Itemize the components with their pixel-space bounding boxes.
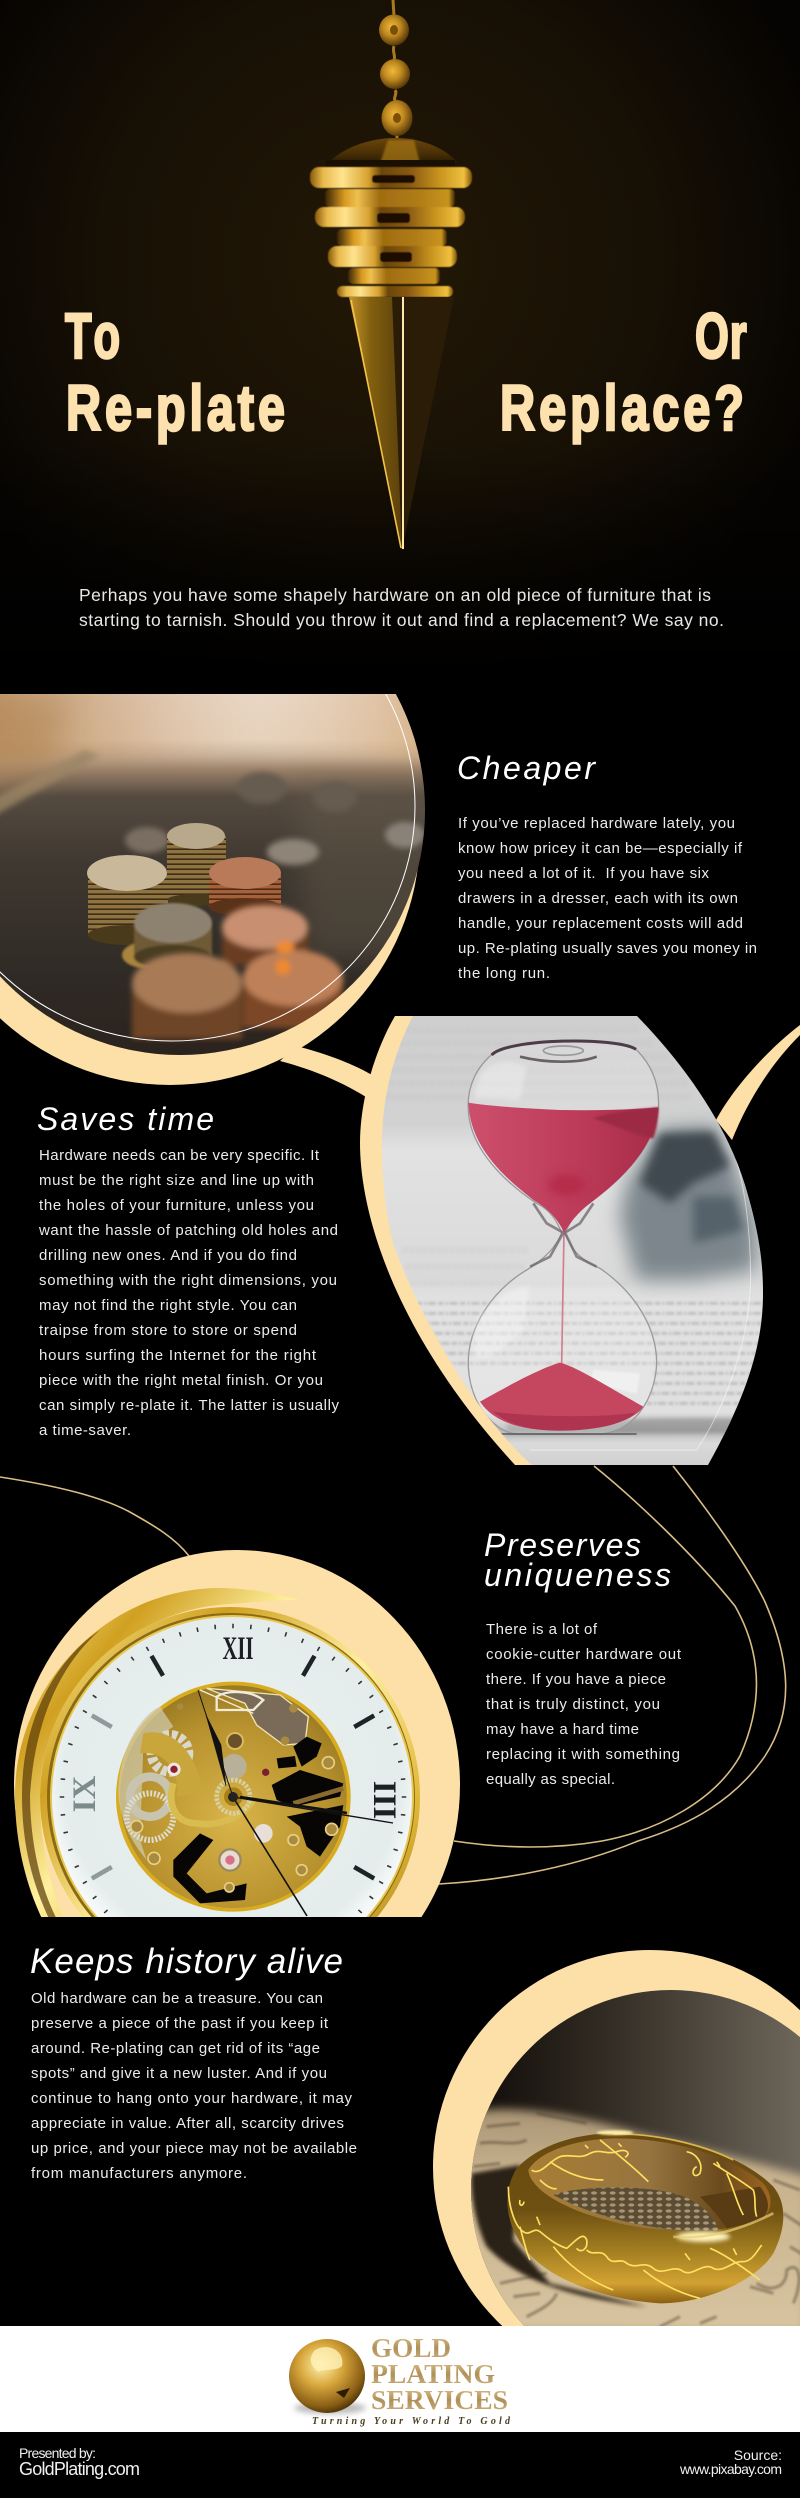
- title: To Re-plate: [65, 300, 285, 445]
- logo wordmark: GOLD: [371, 2333, 451, 2363]
- footer: [0, 2432, 800, 2498]
- text: saves time body: piece with the right metal finish. Or you: [39, 1372, 323, 1389]
- text: preserves body: [486, 1621, 682, 1788]
- icon: gold pendulum: [310, 0, 472, 550]
- shadow: [471, 2165, 647, 2307]
- text: cheaper body: If you’ve replaced hardware lately, you: [458, 815, 735, 832]
- newspaper lines: [417, 1303, 763, 1403]
- text: saves time body: can simply re-plate it. The latter is usually: [39, 1397, 340, 1414]
- presented by: Presented by:: [19, 2445, 96, 2461]
- panel: keeps history alive: [31, 1948, 800, 2326]
- text: keeps history body: [31, 1990, 357, 2182]
- ring: [507, 2130, 783, 2303]
- title: Or Replace?: Replace?: [500, 374, 744, 445]
- heading: Cheaper: Cheaper: [457, 750, 596, 786]
- photo: hourglass: [370, 1016, 770, 1466]
- intro text: [79, 585, 724, 630]
- text: saves time body: [38, 1147, 340, 1439]
- logo band: [0, 2326, 800, 2432]
- text: cheaper body: know how pricey it can be—especially if: [458, 840, 743, 857]
- text: preserves body: may have a hard time: [486, 1721, 639, 1738]
- title: To Re-plate: Re-plate: [66, 374, 285, 445]
- logo wordmark: Turning Your World To Gold: [312, 2416, 511, 2427]
- heading: Preserves uniqueness: [484, 1527, 671, 1593]
- heading: Saves time: Saves time: [37, 1101, 214, 1137]
- text: saves time body: Hardware needs can be very specific. It: [39, 1147, 320, 1164]
- text: cheaper body: up. Re-plating usually saves you money in: [458, 940, 757, 957]
- text: cheaper body: handle, your replacement costs will add: [458, 915, 743, 932]
- text: preserves body: replacing it with something: [486, 1746, 680, 1763]
- ring inscription: [508, 2140, 762, 2298]
- source: Source:: [734, 2447, 782, 2463]
- text: keeps history body: up price, and your piece may not be available: [31, 2140, 357, 2157]
- text: cheaper body: you need a lot of it. If you have six: [458, 865, 710, 882]
- text: saves time body: something with the right dimensions, you: [39, 1272, 337, 1289]
- text: keeps history body: preserve a piece of the past if you keep it: [31, 2015, 329, 2032]
- text: saves time body: a time-saver.: [39, 1422, 131, 1439]
- numerals: [67, 1631, 402, 1819]
- text: keeps history body: appreciate in value. After all, scarcity drives: [31, 2115, 344, 2132]
- text: saves time body: the holes of your furniture, unless you: [39, 1197, 314, 1214]
- text: keeps history body: Old hardware can be a treasure. You can: [31, 1990, 323, 2007]
- text: preserves body: cookie-cutter hardware out: [486, 1646, 682, 1663]
- skeleton movement: [116, 1682, 351, 1912]
- cream arcs beside hourglass: [360, 1016, 800, 1465]
- watch hands: [198, 1690, 393, 1916]
- text: saves time body: hours surfing the Internet for the right: [39, 1347, 317, 1364]
- numerals: IX: [67, 1776, 103, 1812]
- text: keeps history body: from manufacturers anymore.: [31, 2165, 247, 2182]
- hour marks: [92, 1656, 374, 1878]
- heading: Keeps history alive: Keeps history alive: [30, 1942, 343, 1981]
- icon: gold globe: [289, 2339, 366, 2414]
- text: cheaper body: [458, 815, 757, 982]
- text: keeps history body: around. Re-plating can get rid of its “age: [31, 2040, 320, 2057]
- logo wordmark: [312, 2333, 511, 2427]
- hourglass: [468, 1040, 659, 1434]
- heading: Preserves uniqueness: Preserves: [484, 1527, 641, 1563]
- presented by: [19, 2445, 140, 2479]
- title: Or Replace?: Or: [695, 300, 747, 372]
- panel: preserves uniqueness: [14, 1534, 681, 1917]
- logo wordmark: SERVICES: [371, 2385, 508, 2415]
- text: preserves body: that is truly distinct, you: [486, 1696, 660, 1713]
- title: Or Replace?: [500, 300, 747, 445]
- text: saves time body: want the hassle of patching old holes and: [38, 1222, 338, 1239]
- text: cheaper body: the long run.: [458, 965, 550, 982]
- hero background: [0, 0, 800, 680]
- logo wordmark: PLATING: [371, 2359, 495, 2389]
- cream circle behind coins: [0, 868, 418, 1096]
- panel: cheaper: [0, 694, 756, 1096]
- photo: coins: [0, 694, 425, 1055]
- presented by: GoldPlating.com: [19, 2459, 140, 2479]
- panel: saves time: [37, 1016, 800, 1466]
- intro text: starting to tarnish. Should you throw it out and find a replacement? We say no.: [79, 610, 724, 630]
- parchment: [460, 2109, 800, 2333]
- heading: Preserves uniqueness: uniqueness: [484, 1557, 671, 1593]
- text: keeps history body: spots” and give it a new luster. And if you: [31, 2065, 327, 2082]
- photo: pocket watch on cream circle: [14, 1550, 460, 1917]
- source: www.pixabay.com: [679, 2461, 782, 2477]
- source: [679, 2447, 782, 2477]
- photo: gold ring on cream circle: [433, 1950, 800, 2326]
- text: cheaper body: drawers in a dresser, each with its own: [458, 890, 738, 907]
- text: preserves body: there. If you have a piece: [486, 1671, 666, 1688]
- thin gold curve lines: [0, 1466, 786, 1884]
- text: saves time body: drilling new ones. And if you do find: [39, 1247, 297, 1264]
- title: To Re-plate: To: [65, 300, 120, 372]
- text: keeps history body: continue to hang onto your hardware, it may: [31, 2090, 352, 2107]
- text: preserves body: There is a lot of: [486, 1621, 598, 1638]
- text: saves time body: traipse from store to store or spend: [39, 1322, 297, 1339]
- text: saves time body: may not find the right style. You can: [39, 1297, 297, 1314]
- text: preserves body: equally as special.: [486, 1771, 615, 1788]
- numerals: XII: [222, 1631, 254, 1667]
- blurred background shape: [620, 1127, 757, 1280]
- intro text: Perhaps you have some shapely hardware on an old piece of furniture that is: [79, 585, 711, 605]
- numerals: III: [366, 1781, 402, 1819]
- text: saves time body: must be the right size and line up with: [39, 1172, 314, 1189]
